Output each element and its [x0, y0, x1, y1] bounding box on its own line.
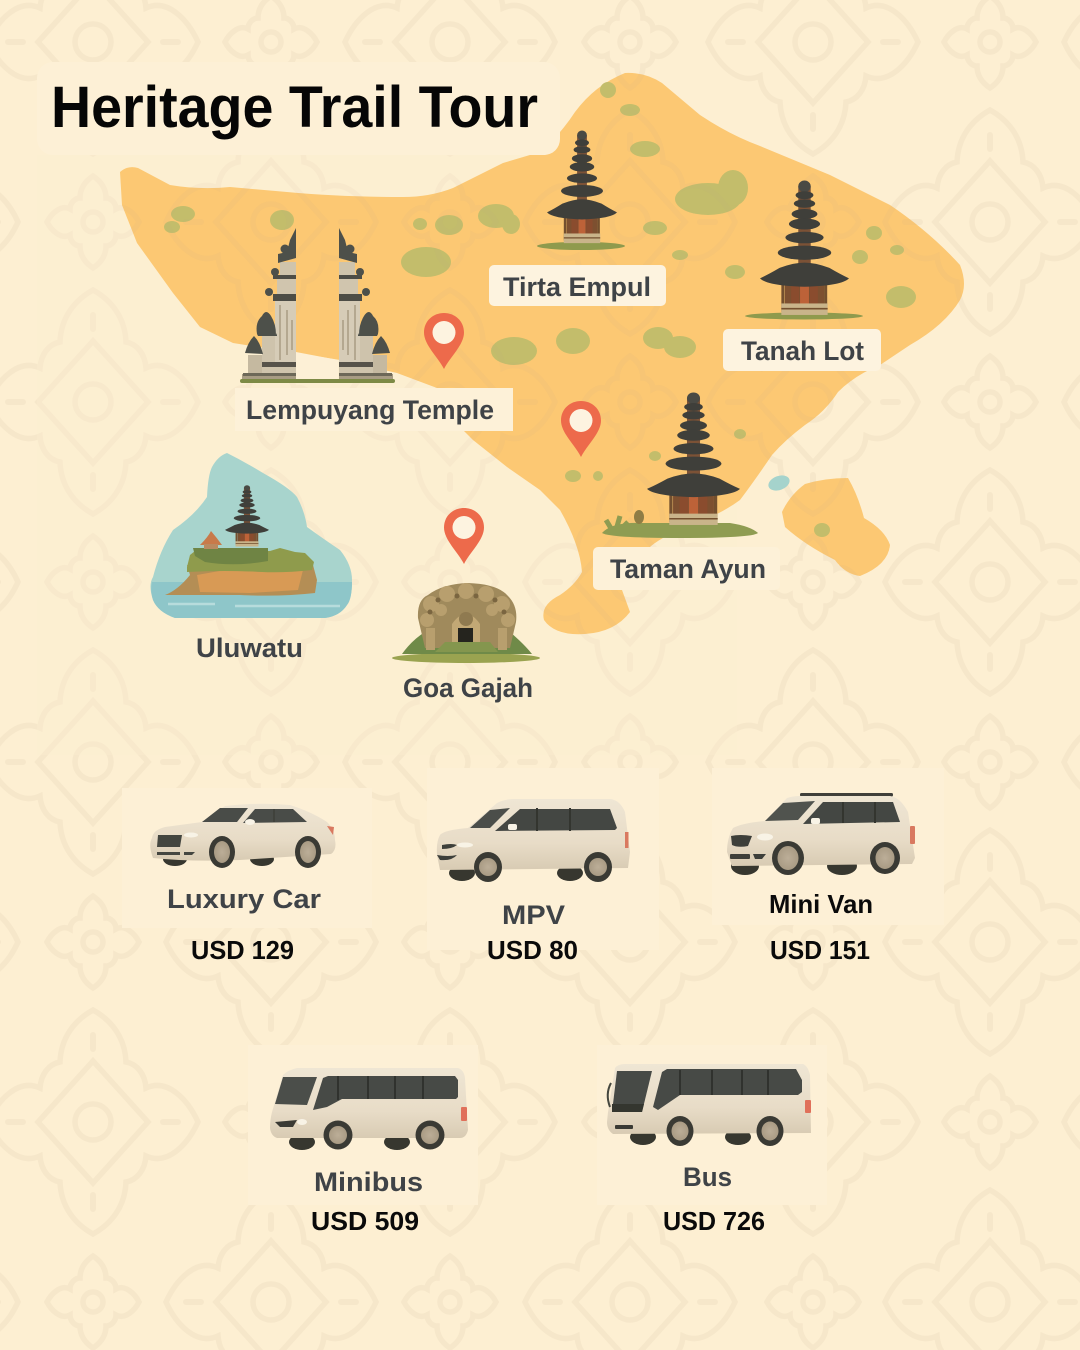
vehicle card: MPV [427, 768, 659, 965]
location: Lempuyang Temple [235, 228, 513, 431]
label: Tanah Lot [723, 329, 881, 371]
icon: Goa Gajah cave [392, 583, 540, 663]
label: Tanah Lot: Tanah Lot [741, 336, 864, 366]
label: Taman Ayun [593, 547, 780, 590]
price: USD 509: USD 509 [311, 1206, 419, 1236]
icon: Lempuyang split gate [240, 228, 395, 383]
label: Uluwatu: Uluwatu [196, 633, 303, 663]
price: USD 726: USD 726 [663, 1206, 765, 1236]
label: Minibus: Minibus [314, 1167, 423, 1197]
icon: mini van [727, 793, 915, 875]
label: Tirta Empul [489, 265, 666, 306]
vehicle card: Bus [597, 1045, 827, 1236]
icon: Tirta Empul pagoda [537, 130, 625, 250]
label: Lempuyang Temple: Lempuyang Temple [246, 395, 494, 425]
location: Tanah Lot [723, 181, 881, 371]
label: Tirta Empul: Tirta Empul [503, 272, 651, 302]
label: Lempuyang Temple [235, 388, 513, 431]
price: USD 129: USD 129 [191, 935, 294, 965]
location: Taman Ayun [593, 393, 780, 590]
vehicle card: Mini Van [712, 768, 944, 965]
label: Luxury Car: Luxury Car [167, 884, 322, 914]
label: Mini Van: Mini Van [769, 889, 873, 919]
pin: map marker 2 [561, 401, 601, 457]
label: Taman Ayun: Taman Ayun [610, 554, 766, 584]
icon: Taman Ayun pagoda [602, 393, 758, 538]
location: Goa Gajah [392, 508, 540, 703]
location: Uluwatu [150, 453, 352, 663]
pin: map marker 1 [424, 313, 464, 369]
label: Bus: Bus [683, 1162, 732, 1192]
icon: MPV [437, 799, 630, 882]
title: Heritage Trail Tour [51, 75, 538, 140]
icon: minibus [270, 1068, 468, 1150]
location: Tirta Empul [489, 130, 666, 306]
icon: luxury car [150, 804, 336, 868]
vehicle card: Minibus [248, 1045, 478, 1236]
label: MPV: MPV [502, 900, 565, 930]
pin: Goa Gajah marker [444, 508, 484, 564]
icon: bus [607, 1064, 811, 1146]
price: USD 151: USD 151 [770, 935, 870, 965]
icon: Tanah Lot pagoda [745, 181, 863, 320]
title [37, 62, 560, 155]
icon: Uluwatu island temple [150, 453, 352, 618]
price: USD 80: USD 80 [487, 935, 578, 965]
label: Goa Gajah: Goa Gajah [403, 673, 533, 703]
map: Bali island [120, 72, 964, 634]
vehicle card: Luxury Car [122, 788, 372, 965]
